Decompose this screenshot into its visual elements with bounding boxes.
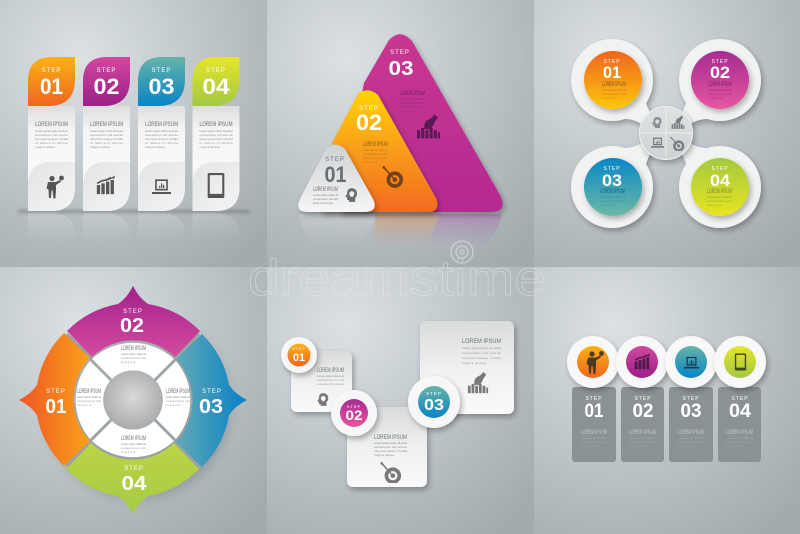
badge 03: 03 — [424, 397, 444, 414]
badge 03: STEP — [426, 391, 442, 396]
square 02 — [347, 407, 427, 487]
triangle 01: STEP — [325, 157, 345, 163]
circle 02: consectetur elit — [708, 92, 732, 96]
triangle 01: LOREM IPSUM — [313, 187, 338, 193]
circle 04: 04 — [710, 171, 731, 190]
centre circle — [104, 370, 162, 430]
ring text bottom: consectetur elit — [121, 446, 146, 450]
card 03: LOREM IPSUM — [145, 122, 178, 128]
triangle 02: LOREM IPSUM — [363, 142, 388, 148]
column 04: consectetur elit — [726, 440, 753, 444]
segment 02: 02 — [120, 315, 144, 337]
column 04 — [718, 387, 761, 462]
triangle 01: consectetur elit sed — [313, 197, 338, 201]
ring text right: consectetur elit — [166, 399, 190, 403]
card 03: ut labore et dolore — [145, 141, 178, 145]
ring text bottom — [121, 436, 146, 454]
square 01: consectetur elit — [317, 378, 344, 382]
card 01: eiusmod tempor incidid — [35, 137, 68, 141]
ring text left: magna — [77, 403, 91, 407]
circle 03: LOREM IPSUM — [600, 189, 625, 195]
ring text left — [77, 389, 101, 407]
ring text bottom: magna — [121, 450, 135, 454]
ring text right: Lorem ipsum dolor sit — [166, 395, 190, 399]
card 01 — [28, 57, 75, 243]
triangle 02: eiusmod tempor — [363, 156, 387, 160]
triangle 01: Lorem ipsum dolor sit — [313, 193, 338, 197]
circle 02: STEP — [711, 59, 729, 65]
card 03: consectetur elit sed do — [145, 133, 178, 137]
card 03: STEP — [152, 68, 171, 74]
circle 03: Lorem ipsum dolor sit — [600, 195, 625, 199]
segment 04: STEP — [124, 466, 144, 472]
triangle 03: 03 — [388, 58, 414, 80]
ring text right — [166, 389, 190, 407]
card 02: LOREM IPSUM — [90, 122, 123, 128]
ring text top: LOREM IPSUM — [121, 346, 146, 352]
badge 02: 02 — [346, 407, 363, 423]
circle 04 — [678, 140, 761, 228]
triangle 02: STEP — [359, 106, 379, 112]
triangle 01 — [298, 144, 375, 212]
circle 04: Lorem ipsum dolor sit — [707, 195, 732, 199]
column 04: magna — [726, 444, 744, 448]
square 02: LOREM IPSUM — [374, 435, 407, 441]
card 01: STEP — [42, 68, 61, 74]
triangle 02 — [320, 90, 437, 212]
panel: pyramid — [298, 34, 502, 246]
card 03: eiusmod tempor incidid — [145, 137, 178, 141]
column 01: STEP — [585, 396, 603, 402]
square 01: LOREM IPSUM — [317, 368, 344, 374]
circle 02: Lorem ipsum dolor sit — [708, 88, 732, 92]
card 02: eiusmod tempor incidid — [90, 137, 123, 141]
square 03: magna aliqua — [462, 361, 486, 365]
column 01: LOREM IPSUM — [581, 430, 607, 436]
column 04: Lorem ipsum dolor sit — [726, 436, 753, 440]
segment 01 — [19, 333, 90, 466]
card 04: 04 — [202, 74, 230, 99]
gap stripes — [67, 334, 199, 466]
triangle 02: consectetur elit sed — [363, 152, 387, 156]
column 02: Lorem ipsum dolor sit — [629, 436, 656, 440]
circle 01: magna — [602, 96, 616, 100]
panel: four circles and hub — [571, 39, 761, 228]
triangle 03 — [340, 34, 502, 212]
card 01: 01 — [40, 74, 63, 99]
ring text top: Lorem ipsum dolor sit — [121, 352, 146, 356]
card 01: consectetur elit sed do — [35, 133, 68, 137]
card 02: STEP — [97, 68, 116, 74]
square 02: Lorem ipsum dolor sit amet — [374, 441, 407, 445]
circle 01: Lorem ipsum dolor sit — [602, 88, 626, 92]
circle 04: STEP — [711, 166, 729, 172]
panel: step cards — [18, 57, 250, 243]
badge 01 — [281, 337, 317, 373]
ring text top: magna — [121, 360, 135, 364]
column 02 — [621, 387, 664, 462]
ring text left: consectetur elit — [77, 399, 101, 403]
card 01: LOREM IPSUM — [35, 122, 68, 128]
column 03: LOREM IPSUM — [678, 430, 704, 436]
segment 04: 04 — [122, 473, 147, 495]
triangle 03: consectetur elit sed — [400, 101, 424, 105]
ring text right: magna — [166, 403, 180, 407]
segment 01: STEP — [46, 389, 66, 395]
ring text bottom: Lorem ipsum dolor sit — [121, 442, 146, 446]
icon circle 02 — [616, 336, 668, 388]
column 03: 03 — [680, 401, 702, 422]
square 03: eiusmod tempor incidid — [462, 356, 501, 360]
card shadow line — [18, 210, 250, 213]
circle 01 — [571, 39, 654, 127]
segment 04 — [66, 443, 199, 514]
column 01: magna — [581, 444, 599, 448]
panel: timeline columns — [567, 336, 766, 462]
icon circle 03 — [665, 336, 717, 388]
wheel shadow — [46, 315, 230, 499]
segment 03: 03 — [199, 396, 223, 418]
triangle 01: 01 — [324, 162, 346, 187]
card 02: consectetur elit sed do — [90, 133, 123, 137]
card 03: 03 — [148, 74, 174, 99]
column 03: consectetur elit — [678, 440, 704, 444]
card 02: magna aliqua — [90, 145, 110, 149]
column 02: LOREM IPSUM — [629, 430, 656, 436]
square 02: eiusmod tempor incidid — [374, 449, 407, 453]
column 01: Lorem ipsum dolor sit — [581, 436, 607, 440]
card 01: Lorem ipsum dolor sit amet — [35, 129, 68, 133]
circle 03: 03 — [602, 171, 622, 190]
column 02: STEP — [634, 396, 652, 402]
card 04: ut labore et dolore — [200, 141, 233, 145]
card 02: ut labore et dolore — [90, 141, 123, 145]
column 02: 02 — [632, 401, 654, 422]
circle 01: 01 — [603, 63, 621, 82]
circle 02 — [678, 39, 761, 127]
square 03: LOREM IPSUM — [462, 339, 501, 345]
column 02: consectetur elit — [629, 440, 656, 444]
circle 03: magna — [600, 203, 614, 207]
column 01: consectetur elit — [581, 440, 607, 444]
column 01: 01 — [584, 401, 604, 422]
triangle 03: STEP — [390, 50, 410, 56]
triangle 03: LOREM IPSUM — [400, 91, 425, 97]
column 03: magna — [678, 444, 696, 448]
hub — [640, 106, 692, 160]
circle 04: consectetur elit — [707, 199, 732, 203]
badge 02 — [331, 390, 377, 436]
icon circle 04 — [714, 336, 766, 388]
card 04: consectetur elit sed do — [200, 133, 233, 137]
card 02 — [83, 57, 130, 243]
circle 01: consectetur elit — [602, 92, 626, 96]
card 01: ut labore et dolore — [35, 141, 68, 145]
square 03 — [420, 321, 514, 414]
column 04: 04 — [729, 401, 751, 422]
white ring — [76, 343, 190, 457]
circle 03: STEP — [603, 166, 621, 172]
segment 03 — [176, 334, 247, 467]
reflections — [299, 214, 502, 246]
ring text left: LOREM IPSUM — [77, 389, 101, 395]
card 02: 02 — [94, 74, 120, 99]
column 04: LOREM IPSUM — [726, 430, 753, 436]
square 03: Lorem ipsum dolor sit amet — [462, 346, 501, 350]
circle 02: magna — [708, 96, 722, 100]
card 04: STEP — [206, 68, 226, 74]
triangle 03: eiusmod tempor — [400, 105, 424, 109]
badge 01: STEP — [292, 347, 306, 351]
square 01 — [291, 351, 352, 412]
circle 02: LOREM IPSUM — [708, 82, 732, 88]
square 02: magna aliqua — [374, 453, 394, 457]
panel: circular cycle — [19, 286, 247, 514]
ring text bottom: LOREM IPSUM — [121, 436, 146, 442]
triangle 02: 02 — [356, 110, 382, 135]
square 02: consectetur elit sed do — [374, 445, 407, 449]
circle 01: STEP — [603, 59, 621, 65]
circle 03: consectetur elit — [600, 199, 625, 203]
segment 01: 01 — [46, 396, 66, 418]
card 03: magna aliqua — [145, 145, 165, 149]
ring text right: LOREM IPSUM — [166, 389, 190, 395]
card 01: magna aliqua — [35, 145, 55, 149]
ring text top: consectetur elit — [121, 356, 146, 360]
column 04: STEP — [731, 396, 749, 402]
triangle 02: Lorem ipsum dolor sit — [363, 148, 387, 152]
card 04: Lorem ipsum dolor sit amet — [200, 129, 233, 133]
card 04 — [192, 57, 240, 243]
column 01 — [572, 387, 616, 462]
panel: square cards — [281, 321, 514, 487]
segment 02: STEP — [123, 309, 143, 315]
square 01: eiusmod tempor — [317, 382, 344, 386]
watermark: dreamstime — [248, 250, 546, 306]
card 03: Lorem ipsum dolor sit amet — [145, 129, 178, 133]
badge 03 — [408, 376, 460, 428]
card 04: eiusmod tempor incidid — [200, 137, 233, 141]
segment 03: STEP — [202, 389, 222, 395]
segment 02 — [67, 286, 200, 357]
circle 04: magna — [707, 203, 721, 207]
triangle 03: Lorem ipsum dolor sit — [400, 97, 424, 101]
circle 03 — [571, 140, 654, 228]
triangle 02: magna — [363, 160, 377, 164]
circle 04: LOREM IPSUM — [707, 189, 732, 195]
ring text top — [121, 346, 146, 364]
card 03 — [138, 57, 185, 243]
triangle 03: magna — [400, 109, 414, 113]
circle 01: LOREM IPSUM — [602, 82, 626, 88]
card 04: LOREM IPSUM — [200, 122, 232, 128]
card 04: magna aliqua — [200, 145, 220, 149]
column 03 — [669, 387, 713, 462]
column 02: magna — [629, 444, 647, 448]
triangle 01: eiusmod tempor — [313, 201, 333, 205]
column 03: STEP — [682, 396, 700, 402]
ring text left: Lorem ipsum dolor sit — [77, 395, 101, 399]
column 03: Lorem ipsum dolor sit — [678, 436, 704, 440]
badge 02: STEP — [347, 404, 361, 409]
badge 01: 01 — [293, 352, 305, 364]
square 03: consectetur elit sed do — [462, 351, 501, 355]
circle 02: 02 — [710, 63, 730, 82]
square 01: Lorem ipsum dolor sit — [317, 374, 344, 378]
card 02: Lorem ipsum dolor sit amet — [90, 129, 123, 133]
icon circle 01 — [567, 336, 619, 388]
